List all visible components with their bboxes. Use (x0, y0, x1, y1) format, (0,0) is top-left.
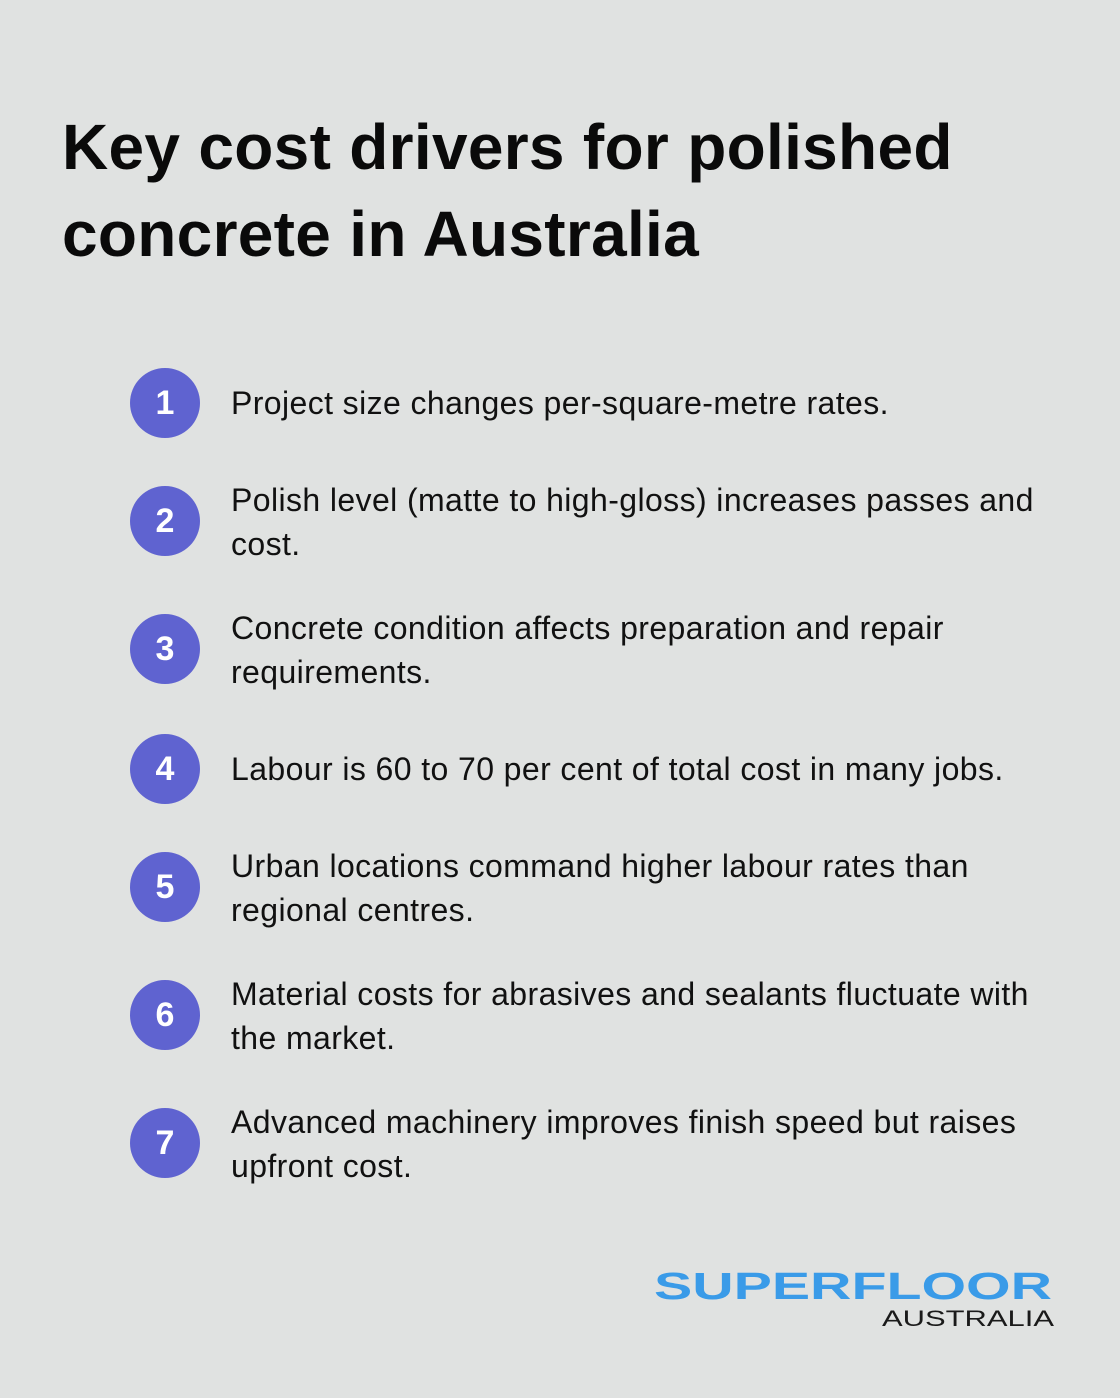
title: concrete in Australia (62, 198, 699, 270)
icon: number 4 (130, 734, 200, 804)
item 6 (130, 976, 1029, 1056)
icon: number 2: 2 (156, 502, 174, 540)
icon: number 7: 7 (156, 1124, 174, 1162)
title: Key cost drivers for polished (62, 111, 953, 183)
logo: AUSTRALIA (882, 1306, 1054, 1331)
icon: number 1 (130, 368, 200, 438)
icon: number 2 (130, 486, 200, 556)
icon: number 3: 3 (156, 630, 174, 668)
item 3: requirements. (231, 654, 432, 690)
item 1 (130, 368, 889, 438)
item 3 (130, 610, 944, 690)
icon: number 6: 6 (156, 996, 174, 1034)
icon: number 5 (130, 852, 200, 922)
item 5: Urban locations command higher labour rates than (231, 848, 969, 884)
item 2: Polish level (matte to high-gloss) increases passes and (231, 482, 1034, 518)
item 7 (130, 1104, 1016, 1184)
item 5: regional centres. (231, 892, 474, 928)
icon: number 3 (130, 614, 200, 684)
icon: number 4: 4 (156, 750, 174, 788)
item 2 (130, 482, 1034, 562)
item 7: Advanced machinery improves finish speed but raises (231, 1104, 1016, 1140)
item 7: upfront cost. (231, 1148, 412, 1184)
icon: number 6 (130, 980, 200, 1050)
item 6: Material costs for abrasives and sealants fluctuate with (231, 976, 1029, 1012)
title (62, 111, 953, 270)
item 3: Concrete condition affects preparation and repair (231, 610, 944, 646)
icon: number 5: 5 (156, 868, 174, 906)
item 5 (130, 848, 969, 928)
item 1: Project size changes per-square-metre rates. (231, 385, 889, 421)
icon: number 1: 1 (156, 384, 174, 422)
logo (654, 1268, 1054, 1331)
item 4: Labour is 60 to 70 per cent of total cost in many jobs. (231, 751, 1004, 787)
item 6: the market. (231, 1020, 395, 1056)
item 2: cost. (231, 526, 301, 562)
icon: number 7 (130, 1108, 200, 1178)
item 4 (130, 734, 1004, 804)
